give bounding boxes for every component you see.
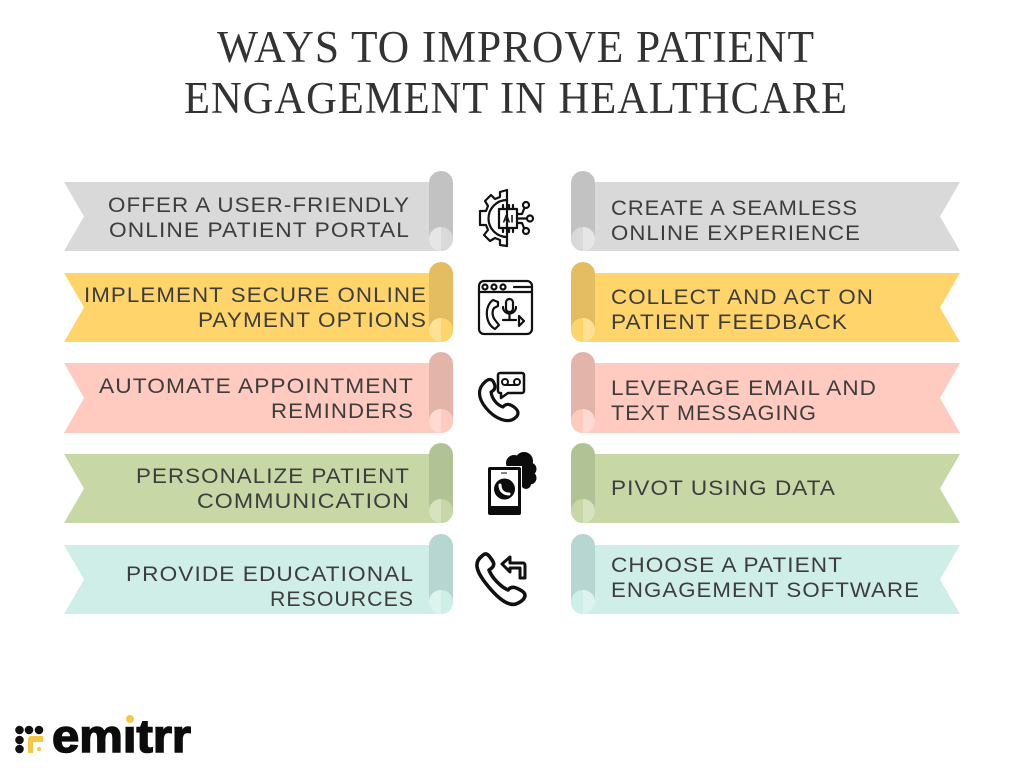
panel: choose a patient engagement software: ENGAGEMENT SOFTWARE	[611, 579, 920, 602]
panel: implement secure online payment options	[64, 262, 453, 342]
panel: offer a user-friendly online patient portal: OFFER A USER-FRIENDLY	[108, 194, 410, 217]
panel: implement secure online payment options: PAYMENT OPTIONS	[198, 309, 427, 332]
title: ENGAGEMENT IN HEALTHCARE	[184, 73, 848, 123]
panel: personalize patient communication	[64, 443, 453, 523]
panel: provide educational resources: RESOURCES	[270, 588, 414, 611]
panel: collect and act on patient feedback: COLLECT AND ACT ON	[611, 286, 874, 309]
panel: create a seamless online experience: CREATE A SEAMLESS	[611, 197, 858, 220]
panel: personalize patient communication: PERSONALIZE PATIENT	[136, 465, 410, 488]
panel: offer a user-friendly online patient portal	[64, 171, 453, 251]
panel: collect and act on patient feedback	[571, 262, 960, 342]
title: WAYS TO IMPROVE PATIENT	[217, 22, 815, 72]
panel: leverage email and text messaging	[571, 352, 960, 433]
title	[184, 22, 848, 123]
panel: create a seamless online experience: ONLINE EXPERIENCE	[611, 222, 861, 245]
panel: automate appointment reminders: REMINDERS	[271, 400, 414, 423]
icon: AI gear with circuit	[480, 190, 533, 246]
panel: automate appointment reminders: AUTOMATE APPOINTMENT	[99, 375, 414, 398]
panel: provide educational resources: PROVIDE EDUCATIONAL	[126, 563, 414, 586]
icon: smartphone with cloud	[487, 452, 536, 516]
panel: automate appointment reminders	[64, 352, 453, 433]
panel: leverage email and text messaging: LEVERAGE EMAIL AND	[611, 377, 877, 400]
icon: phone with voicemail bubble	[480, 373, 524, 421]
panel: choose a patient engagement software	[571, 534, 960, 614]
panel: pivot using data: PIVOT USING DATA	[611, 477, 836, 500]
panel: leverage email and text messaging: TEXT MESSAGING	[611, 402, 817, 425]
logo mark	[15, 726, 43, 753]
panel: choose a patient engagement software: CHOOSE A PATIENT	[611, 554, 843, 577]
icon: browser window with phone and microphone	[479, 281, 532, 334]
panel: pivot using data	[571, 443, 960, 523]
icon: phone with return arrow	[477, 554, 525, 604]
panel: provide educational resources	[64, 534, 453, 614]
panel: collect and act on patient feedback: PATIENT FEEDBACK	[611, 311, 848, 334]
icon: AI gear with circuit: AI	[502, 214, 514, 226]
logo: emitrr: emitrr	[52, 710, 191, 762]
panel: personalize patient communication: COMMUNICATION	[197, 490, 410, 513]
panel: implement secure online payment options: IMPLEMENT SECURE ONLINE	[84, 284, 427, 307]
panel: create a seamless online experience	[571, 171, 960, 251]
panel: offer a user-friendly online patient portal: ONLINE PATIENT PORTAL	[109, 219, 410, 242]
